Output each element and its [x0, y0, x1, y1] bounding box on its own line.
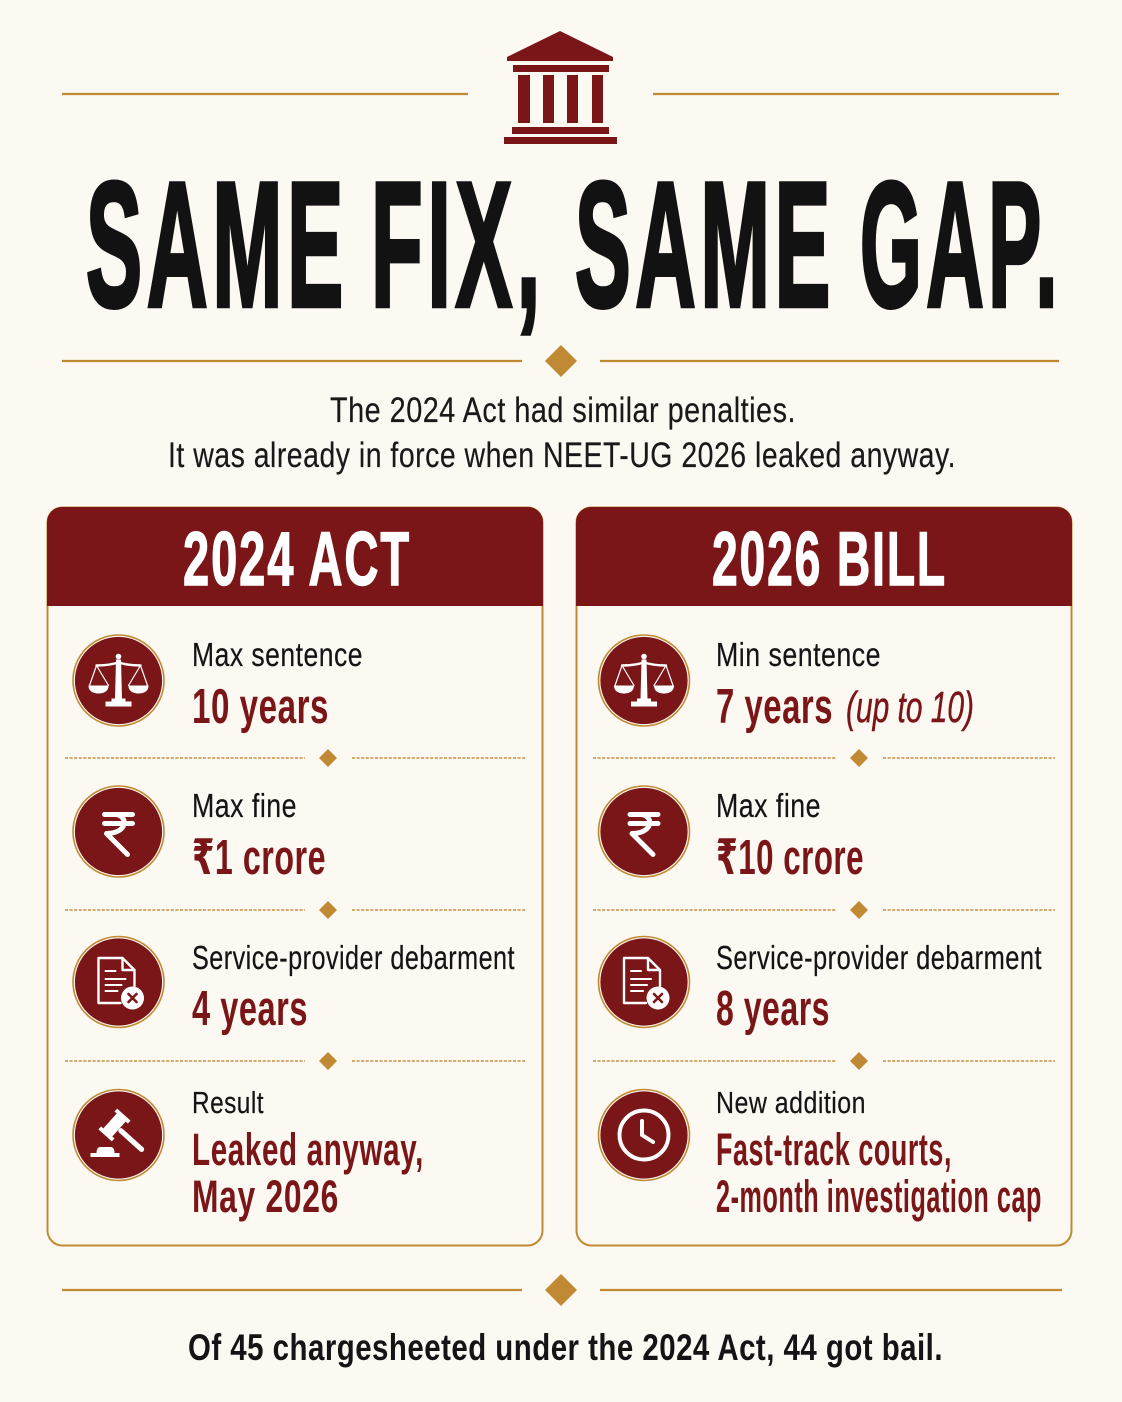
row: result: May 2026 — [192, 1171, 339, 1222]
row: min sentence: 7 years — [716, 680, 833, 734]
row: max fine: Max fine — [716, 787, 821, 824]
title: FIX, — [371, 145, 545, 344]
row: result: Leaked anyway, — [192, 1124, 424, 1175]
panel header: 2024 Act — [47, 507, 543, 606]
panel header: 2024 Act: 2024 ACT — [183, 517, 411, 602]
icon: title divider diamond — [545, 345, 577, 377]
subtitle — [168, 391, 956, 475]
row: max fine — [716, 787, 864, 885]
panel: 2026 Bill — [576, 507, 1072, 1246]
row: max sentence: 10 years — [192, 680, 329, 734]
row: max sentence — [192, 636, 363, 734]
row: new addition: New addition — [716, 1085, 866, 1120]
icon: scales of justice — [73, 635, 164, 726]
row: max fine: ₹10 crore — [716, 831, 864, 885]
row: new addition — [716, 1085, 1042, 1222]
row: result: Result — [192, 1085, 264, 1120]
row: max fine: Max fine — [192, 787, 297, 824]
icon: rupee — [598, 786, 690, 877]
footer statement: Of 45 chargesheeted under the 2024 Act, 44 got bail. — [188, 1327, 943, 1368]
row: max fine: ₹1 crore — [192, 831, 326, 885]
icon: document with cross — [73, 936, 164, 1028]
row: min sentence: (up to 10) — [846, 683, 974, 732]
icon: rupee — [73, 786, 164, 877]
row: debarment: 8 years — [716, 982, 830, 1036]
icon: classical government building — [504, 31, 617, 144]
row: min sentence — [716, 636, 974, 734]
icon: scales of justice — [598, 635, 690, 726]
row: debarment — [192, 939, 515, 1036]
panel: 2024 Act — [47, 507, 543, 1246]
row: min sentence: Min sentence — [716, 636, 881, 673]
row: new addition: Fast-track courts, — [716, 1124, 952, 1175]
title: SAME — [86, 145, 348, 344]
title: SAME — [575, 145, 835, 344]
subtitle: The 2024 Act had similar penalties. — [330, 391, 796, 430]
icon: document with cross — [598, 936, 690, 1028]
panel header: 2026 Bill: 2026 BILL — [712, 517, 947, 602]
row: max fine — [192, 787, 326, 885]
icon: clock — [598, 1090, 690, 1180]
icon: gavel — [73, 1090, 164, 1180]
row: debarment: 4 years — [192, 982, 308, 1036]
icon: footer divider diamond — [545, 1274, 577, 1306]
subtitle: It was already in force when NEET-UG 2026 leaked anyway. — [168, 436, 956, 475]
row: max sentence: Max sentence — [192, 636, 363, 673]
row: result — [192, 1085, 424, 1222]
row: debarment — [716, 939, 1042, 1036]
row: debarment: Service-provider debarment — [192, 939, 515, 976]
panel header: 2026 Bill — [576, 507, 1072, 606]
title — [86, 145, 1062, 344]
